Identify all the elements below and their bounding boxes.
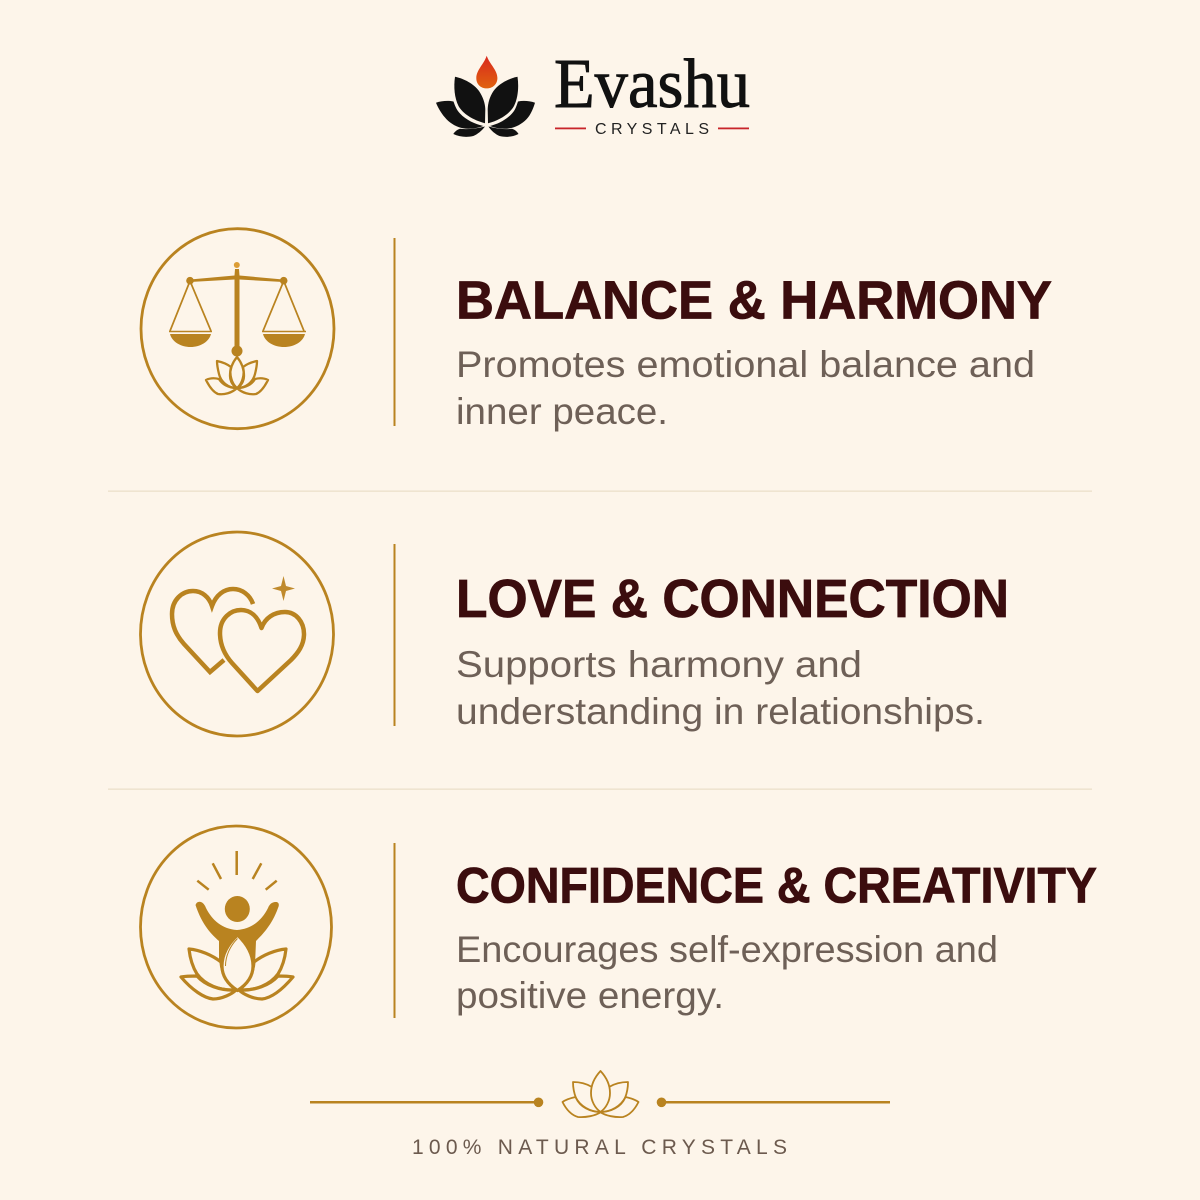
heading: LOVE & CONNECTION bbox=[456, 569, 1009, 629]
panel: balance and harmony bbox=[141, 229, 1052, 432]
vertical divider bbox=[394, 544, 396, 726]
icon: two hearts with sparkle bbox=[140, 532, 334, 736]
heading: BALANCE & HARMONY bbox=[456, 270, 1052, 330]
description bbox=[456, 344, 1035, 432]
description: understanding in relationships. bbox=[456, 691, 985, 732]
icon: lotus with red drop bbox=[436, 56, 535, 137]
icon: lotus bbox=[562, 1071, 638, 1117]
brand name: Evashu bbox=[554, 46, 750, 123]
description: Supports harmony and bbox=[456, 644, 862, 685]
description bbox=[456, 644, 985, 732]
brand subtitle: CRYSTALS bbox=[595, 121, 709, 138]
vertical divider bbox=[394, 843, 396, 1018]
icon: figure rising from lotus bbox=[140, 826, 332, 1028]
heading: CONFIDENCE & CREATIVITY bbox=[456, 858, 1097, 914]
icon: scales with lotus bbox=[141, 229, 334, 429]
description: Encourages self-expression and bbox=[456, 929, 998, 970]
panel: confidence and creativity bbox=[140, 826, 1097, 1028]
description: positive energy. bbox=[456, 975, 724, 1016]
footer ornament bbox=[310, 1071, 890, 1117]
vertical divider bbox=[394, 238, 396, 426]
description: inner peace. bbox=[456, 391, 668, 432]
footer tagline: 100% NATURAL CRYSTALS bbox=[412, 1136, 787, 1159]
description bbox=[456, 929, 998, 1016]
description: Promotes emotional balance and bbox=[456, 344, 1035, 385]
logo bbox=[436, 46, 750, 138]
panel: love and connection bbox=[140, 532, 1009, 736]
